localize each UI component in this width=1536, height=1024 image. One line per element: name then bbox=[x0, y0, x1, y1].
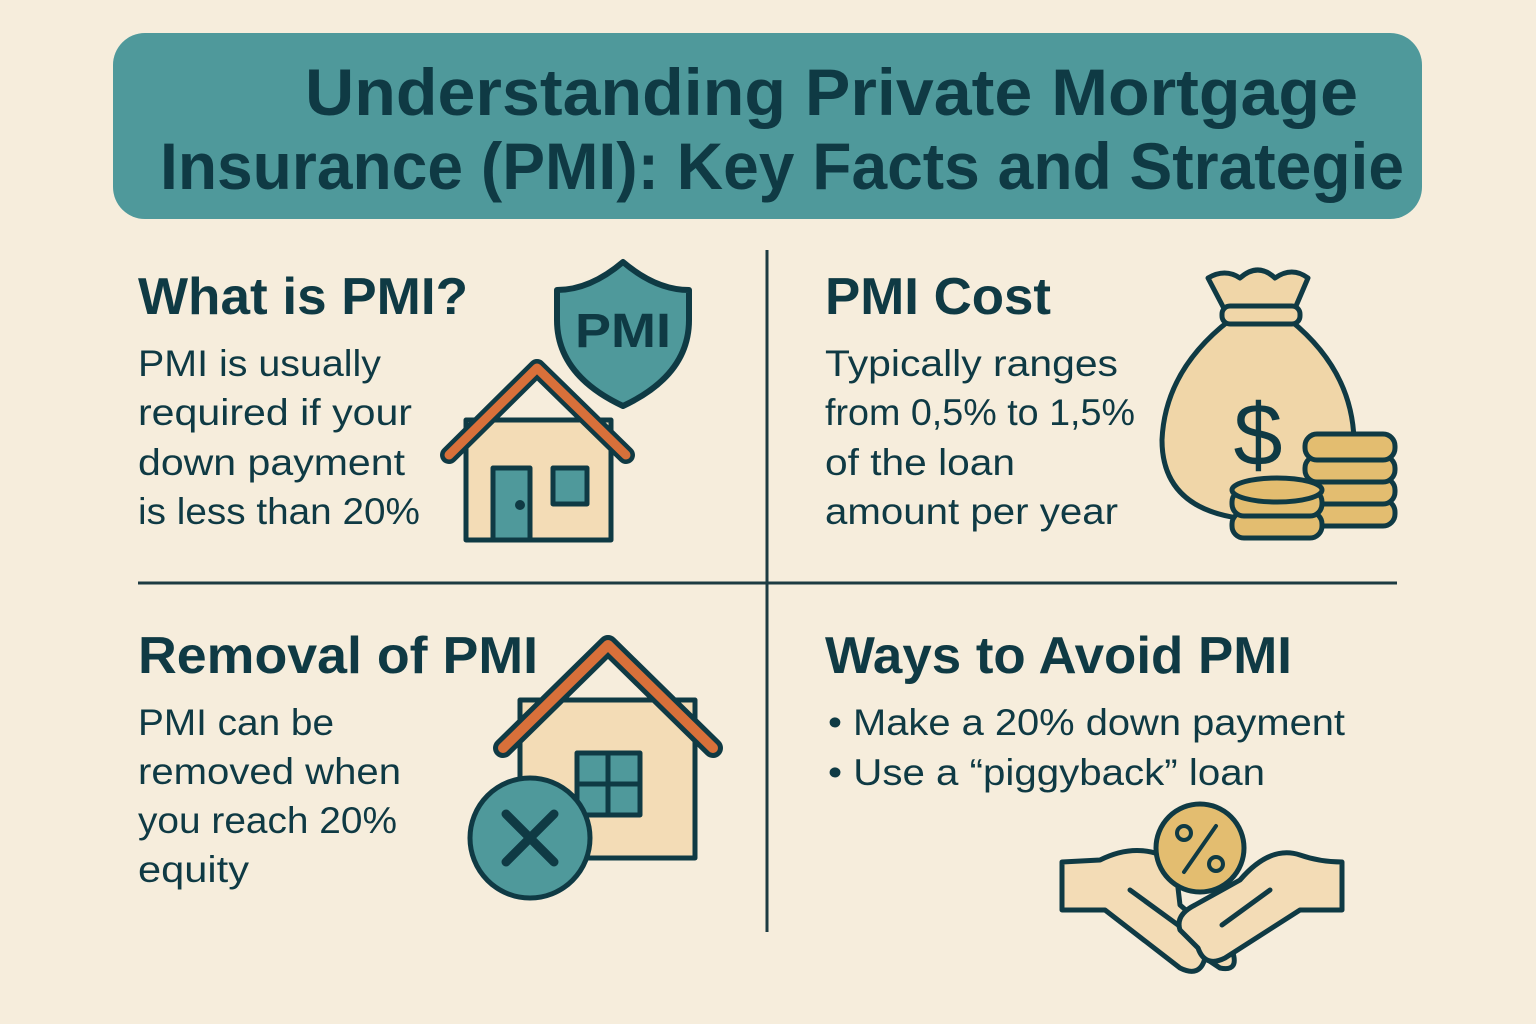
panel: what is PMI bbox=[138, 268, 468, 532]
icon: house with X bbox=[470, 645, 713, 898]
text block: bullets: • Use a “piggyback” loan bbox=[828, 752, 1265, 793]
panel: removal of PMI bbox=[138, 627, 538, 890]
title bbox=[160, 55, 1404, 203]
icon: shield PMI: PMI bbox=[575, 305, 671, 358]
heading: PMI Cost: PMI Cost bbox=[825, 268, 1051, 326]
text block: removal body bbox=[138, 702, 401, 890]
heading: What is PMI: What is PMI? bbox=[138, 268, 468, 326]
icon: house bbox=[449, 368, 626, 540]
text block: removal body: you reach 20% bbox=[138, 800, 397, 841]
text block: what is PMI body: down payment bbox=[138, 442, 406, 483]
text block: removal body: equity bbox=[138, 849, 250, 890]
text block: removal body: removed when bbox=[138, 751, 401, 792]
text block: cost body: Typically ranges bbox=[825, 343, 1118, 384]
text block: what is PMI body: required if your bbox=[138, 392, 412, 433]
panel: PMI cost bbox=[825, 268, 1135, 532]
panel: ways to avoid PMI bbox=[825, 627, 1346, 793]
text block: cost body bbox=[825, 343, 1135, 532]
heading: Removal of PMI: Removal of PMI bbox=[138, 627, 538, 685]
text block: bullets: • Make a 20% down payment bbox=[828, 702, 1346, 743]
text block: removal body: PMI can be bbox=[138, 702, 334, 743]
title: Understanding Private Mortgage bbox=[305, 55, 1358, 129]
text block: what is PMI body bbox=[138, 343, 420, 532]
text block: cost body: of the loan bbox=[825, 442, 1015, 483]
heading: Ways to Avoid PMI: Ways to Avoid PMI bbox=[825, 627, 1292, 685]
icon: money bag with coins bbox=[1162, 270, 1395, 538]
icon: shield PMI bbox=[557, 262, 689, 406]
text block: what is PMI body: is less than 20% bbox=[138, 491, 420, 532]
title: Insurance (PMI): Key Facts and Strategie bbox=[160, 129, 1404, 203]
text block: cost body: from 0,5% to 1,5% bbox=[825, 392, 1135, 433]
title banner bbox=[113, 33, 1422, 219]
text block: what is PMI body: PMI is usually bbox=[138, 343, 382, 384]
text block: cost body: amount per year bbox=[825, 491, 1118, 532]
text block: bullets bbox=[828, 702, 1346, 793]
icon: hands with percent coin bbox=[1062, 804, 1342, 971]
icon: money bag with coins: $ bbox=[1234, 385, 1282, 484]
